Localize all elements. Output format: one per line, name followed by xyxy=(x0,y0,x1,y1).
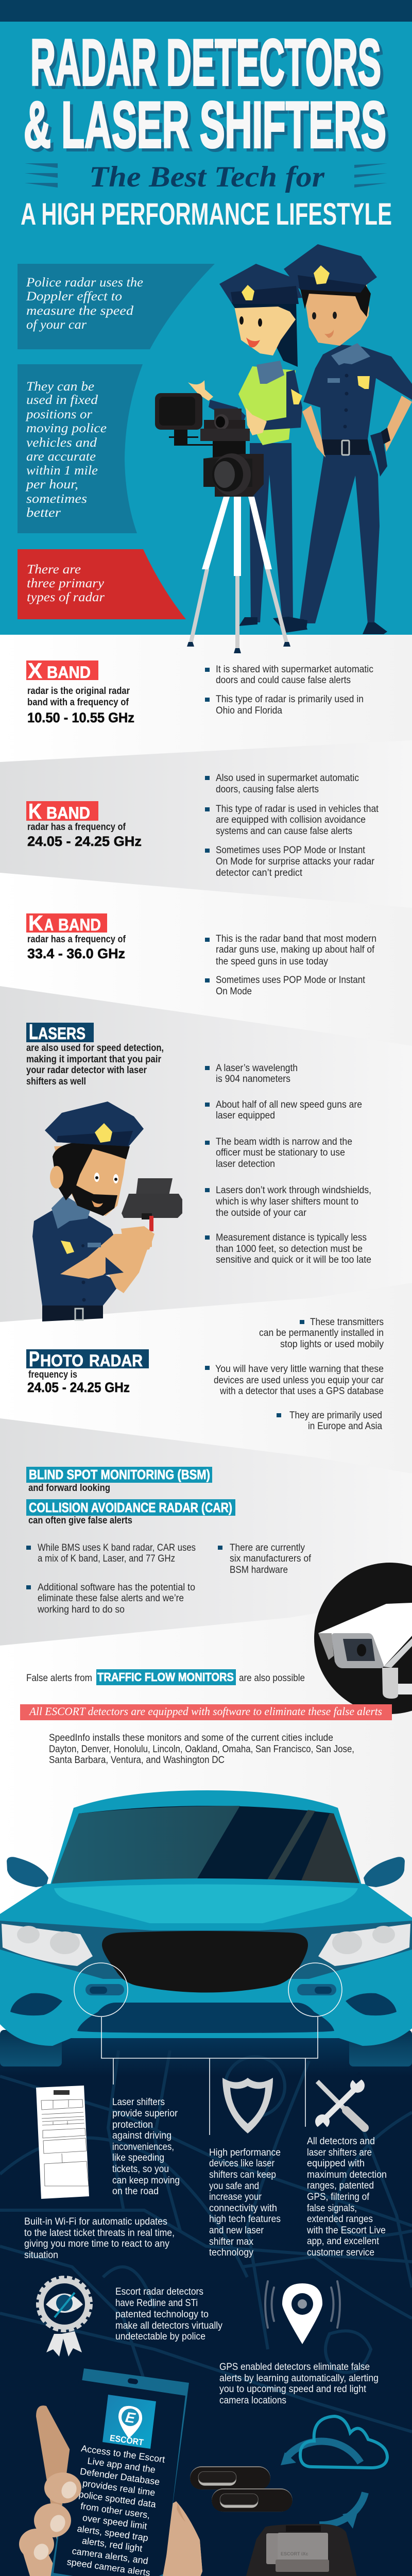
radar detector product xyxy=(245,2524,358,2576)
text: speedinfo cities xyxy=(49,1733,354,1766)
x band bullets: Ohio and Florida xyxy=(216,705,282,716)
k band bullets: Also used in supermarket automatic xyxy=(216,773,359,784)
ka band: A xyxy=(44,916,54,934)
illustration: hand holding phone with escort app: E xyxy=(125,2409,137,2426)
ka band bullets: radar guns use, making up about half of xyxy=(216,944,375,955)
illustration: hand holding phone with escort app: camera alerts, and xyxy=(72,2546,149,2566)
bsm bullets: eliminate these false alerts and we’re xyxy=(38,1593,184,1604)
text: laser shifters provide protection: inconveniences, xyxy=(112,2142,174,2153)
photo radar xyxy=(26,1347,149,1395)
text: all detectors and laser shifters: laser shifters are xyxy=(307,2147,372,2158)
text: speedinfo cities: SpeedInfo installs these monitors and some of the current cities include xyxy=(49,1733,333,1743)
k band bullets: Sometimes uses POP Mode or Instant xyxy=(216,845,366,856)
traffic flow monitors: False alerts from xyxy=(26,1673,92,1684)
k band: BAND xyxy=(46,804,90,822)
x band: radar is the original radar xyxy=(27,686,130,697)
lasers xyxy=(26,1020,164,1087)
photo radar bullets: They are primarily used xyxy=(289,1410,382,1421)
illustration: hand holding phone with escort app: from other users, xyxy=(80,2501,151,2520)
bsm bullets: There are currently xyxy=(230,1543,305,1553)
bsm bullets: working hard to do so xyxy=(37,1604,125,1615)
text: built-in wi-fi: situation xyxy=(24,2250,58,2261)
illustration: hand holding phone with escort app: police spotted data xyxy=(78,2489,157,2510)
illustration: hand holding phone with escort app: alerts, red light xyxy=(81,2535,143,2554)
laser bullets: About half of all new speed guns are xyxy=(216,1099,362,1110)
traffic flow monitors: TRAFFIC FLOW MONITORS xyxy=(97,1670,234,1684)
icon: cloud and sync arrows xyxy=(281,2416,387,2529)
k band xyxy=(26,799,142,849)
illustration: female officer xyxy=(188,264,307,633)
blind spot monitoring and collision avoidance radar: can often give false alerts xyxy=(28,1515,132,1526)
blind spot monitoring and collision avoidance radar xyxy=(26,1467,235,1526)
illustration: hand holding phone with escort app: ESCORT xyxy=(109,2433,144,2448)
panel: police radar intro: of your car xyxy=(26,318,87,332)
k band: K xyxy=(28,799,42,823)
k band bullets: are equipped with collision avoidance xyxy=(216,815,366,825)
text: built-in wi-fi: to the latest ticket threats in real time, xyxy=(24,2228,175,2239)
panel: three primary types of radar: types of radar xyxy=(27,590,105,604)
text: gps enabled detectors: alerts by learning automatically, alerting xyxy=(219,2373,379,2384)
illustration: hand holding phone with escort app: over speed limit xyxy=(82,2513,148,2531)
text: high performance devices: high tech features xyxy=(209,2214,281,2225)
callout lines from fog lights xyxy=(74,1963,342,2135)
panel: three primary types of radar: three primary xyxy=(27,577,105,590)
text: laser shifters provide protection: on the road xyxy=(112,2186,159,2197)
panel: police radar intro xyxy=(18,264,215,349)
x band bullets: doors and could cause false alerts xyxy=(216,675,351,686)
text: high performance devices: shifter max xyxy=(209,2236,253,2247)
k band bullets: This type of radar is used in vehicles that xyxy=(216,804,379,815)
laser bullets: than 1000 feet, so detection must be xyxy=(216,1244,363,1255)
k band: 24.05 - 24.25 GHz xyxy=(27,834,142,849)
laser bullets: laser detection xyxy=(216,1159,275,1170)
photo radar bullets: stop lights or used mobily xyxy=(280,1339,384,1350)
panel: fixed or moving positions: They can be xyxy=(26,380,94,394)
ka band bullets: On Mode xyxy=(216,986,252,997)
traffic flow monitors: are also possible xyxy=(239,1673,305,1684)
laser bullets: is 904 nanometers xyxy=(216,1074,290,1084)
text: all detectors and laser shifters: false signals, xyxy=(307,2203,357,2214)
k band bullets xyxy=(205,773,379,878)
panel: fixed or moving positions: per hour, xyxy=(25,478,78,492)
laser bullets: sensitive and quick or it will be too late xyxy=(216,1255,371,1265)
text: high performance devices: High performance xyxy=(209,2147,281,2158)
photo radar bullets: can be permanently installed in xyxy=(259,1328,384,1338)
lasers: shifters as well xyxy=(26,1076,86,1087)
photo radar bullets: These transmitters xyxy=(310,1317,384,1328)
panel: police radar intro: Police radar uses the xyxy=(26,276,143,290)
icon: shield xyxy=(222,2078,273,2133)
text: laser shifters provide protection xyxy=(112,2097,180,2197)
text: all detectors and laser shifters: app, and excellent xyxy=(307,2236,380,2247)
laser bullets: laser equipped xyxy=(216,1110,275,1121)
text: laser shifters provide protection: like speeding xyxy=(112,2153,164,2163)
ka band: radar has a frequency of xyxy=(27,934,126,945)
illustration: car front xyxy=(0,1790,412,2066)
text: high performance devices: and new laser xyxy=(209,2225,264,2236)
ka band: 33.4 - 36.0 GHz xyxy=(27,946,125,961)
text: all detectors and laser shifters: equipped with xyxy=(307,2158,365,2169)
ka band bullets xyxy=(205,934,376,997)
photo radar bullets: with a detector that uses a GPS database xyxy=(219,1386,384,1397)
panel: fixed or moving positions: positions or xyxy=(25,408,92,421)
bsm bullets: Additional software has the potential to xyxy=(38,1582,195,1593)
blind spot monitoring and collision avoidance radar: and forward looking xyxy=(28,1483,110,1494)
illustration: officer with laser gun xyxy=(32,1101,182,1321)
text: all detectors and laser shifters xyxy=(306,2136,387,2258)
icon: gps pin xyxy=(265,2281,340,2344)
panel: fixed or moving positions xyxy=(18,364,143,533)
text: escort radar detectors: make all detectors virtually xyxy=(115,2320,222,2331)
radar detector product: ESCORT iXc xyxy=(281,2551,308,2556)
text: all detectors and laser shifters: All detectors and xyxy=(307,2136,375,2147)
lasers: your radar detector with laser xyxy=(26,1065,147,1076)
blind spot monitoring and collision avoidance radar: BLIND SPOT MONITORING (BSM) xyxy=(29,1467,210,1482)
x band bullets: It is shared with supermarket automatic xyxy=(216,664,373,675)
illustration: hand holding phone with escort app xyxy=(19,2368,202,2576)
text: high performance devices: technology xyxy=(209,2247,253,2258)
photo radar: RADAR xyxy=(89,1351,143,1370)
lasers: ASERS xyxy=(38,1024,85,1043)
laser bullets: Lasers don’t work through windshields, xyxy=(216,1185,371,1196)
ka band bullets: This is the radar band that most modern xyxy=(216,934,376,944)
text: escort radar detectors: have Redline and STi xyxy=(115,2298,198,2309)
text: laser shifters provide protection: tickets, so you xyxy=(112,2164,169,2175)
text: all detectors and laser shifters: ranges, patented xyxy=(307,2180,374,2191)
text: laser shifters provide protection: provide superior xyxy=(112,2108,178,2119)
laser bullets: Measurement distance is typically less xyxy=(216,1232,367,1243)
text: escort radar detectors xyxy=(115,2286,222,2342)
text: escort radar detectors: patented technology to xyxy=(115,2309,209,2320)
text: all detectors and laser shifters: customer service xyxy=(307,2247,374,2258)
ka band: BAND xyxy=(58,916,101,934)
laser shifter pair xyxy=(190,2466,293,2512)
k band bullets: systems and can cause false alerts xyxy=(216,826,352,837)
text: gps enabled detectors: camera locations xyxy=(219,2395,286,2406)
laser bullets xyxy=(205,1063,371,1265)
callout: escort detectors: All ESCORT detectors are equipped with software to eliminate these false alerts xyxy=(28,1705,382,1718)
text: high performance devices xyxy=(209,2147,281,2258)
icon: speeding ticket xyxy=(36,2086,89,2199)
text: gps enabled detectors xyxy=(219,2362,379,2406)
x band: 10.50 - 10.55 GHz xyxy=(27,710,134,725)
icon: wrench and screwdriver xyxy=(315,2072,365,2134)
ka band bullets: Sometimes uses POP Mode or Instant xyxy=(216,975,366,986)
icon: rosette with hidden eye xyxy=(39,2278,90,2357)
panel: fixed or moving positions: within 1 mile xyxy=(26,464,98,478)
panel: fixed or moving positions: better xyxy=(26,506,61,520)
lasers: L xyxy=(29,1020,38,1044)
bsm bullets: BSM hardware xyxy=(230,1565,288,1575)
laser bullets: A laser’s wavelength xyxy=(216,1063,298,1074)
panel: fixed or moving positions: sometimes xyxy=(26,492,87,506)
x band bullets xyxy=(205,664,373,716)
bsm bullets: six manufacturers of xyxy=(230,1553,312,1564)
panel: fixed or moving positions: vehicles and xyxy=(26,436,97,450)
text: gps enabled detectors: you to upcoming speed and red light xyxy=(219,2384,367,2395)
text: speedinfo cities: Dayton, Denver, Honolulu, Lincoln, Oakland, Omaha, San Francisco, San Jose, xyxy=(49,1744,354,1755)
text: laser shifters provide protection: protection xyxy=(112,2120,153,2130)
text: speedinfo cities: Santa Barbara, Ventura, and Washington DC xyxy=(49,1755,225,1766)
illustration: male officer xyxy=(284,244,412,634)
photo radar bullets: You will have very little warning that these xyxy=(215,1364,384,1375)
subtitle: the best tech for: The Best Tech for xyxy=(89,161,325,193)
panel: police radar intro: measure the speed xyxy=(26,304,134,318)
laser bullets: officer must be stationary to use xyxy=(216,1147,345,1158)
panel: fixed or moving positions: moving police xyxy=(26,421,107,435)
text: high performance devices: shifters can keep xyxy=(209,2170,276,2180)
illustration: hand holding phone with escort app: Defender Database xyxy=(79,2466,160,2487)
illustration: camera on tripod xyxy=(155,393,290,653)
panel: three primary types of radar: There are xyxy=(27,563,81,577)
panel: fixed or moving positions: are accurate xyxy=(26,450,96,464)
k band bullets: detector can’t predict xyxy=(216,868,303,878)
text: all detectors and laser shifters: GPS, filtering of xyxy=(307,2192,370,2202)
panel: fixed or moving positions: used in fixed xyxy=(26,393,98,407)
laser bullets: The beam width is narrow and the xyxy=(216,1137,352,1147)
illustration: hand holding phone with escort app: alerts, speed trap xyxy=(77,2523,149,2543)
text: laser shifters provide protection: against driving xyxy=(112,2130,171,2141)
text: high performance devices: increase your xyxy=(209,2192,262,2202)
k band: radar has a frequency of xyxy=(27,822,126,833)
x band xyxy=(26,658,134,725)
laser bullets: the outside of your car xyxy=(216,1208,307,1218)
text: high performance devices: connectivity with xyxy=(209,2203,277,2214)
x band: band with a frequency of xyxy=(27,697,129,708)
x band: BAND xyxy=(47,663,91,682)
ka band bullets: the speed guns in use today xyxy=(216,956,328,967)
subtitle: the best tech for xyxy=(25,161,387,193)
photo radar: 24.05 - 24.25 GHz xyxy=(27,1380,130,1395)
text: escort radar detectors: Escort radar detectors xyxy=(115,2286,203,2297)
photo radar: HOTO xyxy=(40,1351,83,1370)
panel: three primary types of radar xyxy=(18,549,186,619)
text: high performance devices: devices like laser xyxy=(209,2158,275,2169)
bsm bullets xyxy=(26,1543,312,1615)
dark section xyxy=(0,2035,412,2576)
text: high performance devices: you safe and xyxy=(209,2181,259,2192)
icon: surveillance camera xyxy=(314,1563,412,1714)
blind spot monitoring and collision avoidance radar: COLLISION AVOIDANCE RADAR (CAR) xyxy=(29,1500,232,1515)
text: all detectors and laser shifters: extended ranges xyxy=(307,2214,373,2225)
x band: X xyxy=(28,658,42,683)
photo radar: P xyxy=(29,1347,40,1371)
x band bullets: This type of radar is primarily used in xyxy=(216,694,364,705)
traffic flow monitors xyxy=(26,1669,305,1685)
photo radar bullets: devices are used unless you equip your car xyxy=(214,1375,384,1386)
lasers: making it important that you pair xyxy=(26,1054,162,1065)
text: all detectors and laser shifters: with the Escort Live xyxy=(306,2225,386,2236)
text: laser shifters provide protection: Laser shifters xyxy=(112,2097,165,2108)
bsm bullets: While BMS uses K band radar, CAR uses xyxy=(38,1543,196,1553)
panel: police radar intro: Doppler effect to xyxy=(26,290,122,303)
text: laser shifters provide protection: can keep moving xyxy=(112,2175,180,2186)
illustration: hand holding phone with escort app: Live app and the xyxy=(87,2455,156,2475)
photo radar bullets xyxy=(205,1317,384,1432)
text: built-in wi-fi: Built-in Wi-Fi for automatic updates xyxy=(24,2216,167,2227)
text: gps enabled detectors: GPS enabled detectors eliminate false xyxy=(219,2362,370,2372)
photo radar bullets: in Europe and Asia xyxy=(308,1421,382,1432)
ka band: K xyxy=(28,911,43,935)
photo radar: frequency is xyxy=(28,1369,77,1380)
text: all detectors and laser shifters: maximum detection xyxy=(307,2170,387,2180)
k band bullets: On Mode for surprise attacks your radar xyxy=(216,856,375,867)
illustration: hand holding phone with escort app: provides real time xyxy=(82,2478,156,2498)
text: built-in wi-fi: giving you more time to react to any xyxy=(24,2239,169,2249)
bsm bullets: a mix of K band, Laser, and 77 GHz xyxy=(38,1553,175,1564)
text: escort radar detectors: undetectable by police xyxy=(115,2331,205,2342)
laser bullets: which is why laser shifters mount to xyxy=(215,1196,358,1207)
illustration: hand holding phone with escort app: Access to the Escort xyxy=(80,2443,165,2465)
text: built-in wi-fi xyxy=(24,2216,175,2261)
ka band xyxy=(26,911,126,961)
k band bullets: doors, causing false alerts xyxy=(216,784,319,795)
lasers: are also used for speed detection, xyxy=(26,1043,164,1054)
title xyxy=(24,26,389,164)
